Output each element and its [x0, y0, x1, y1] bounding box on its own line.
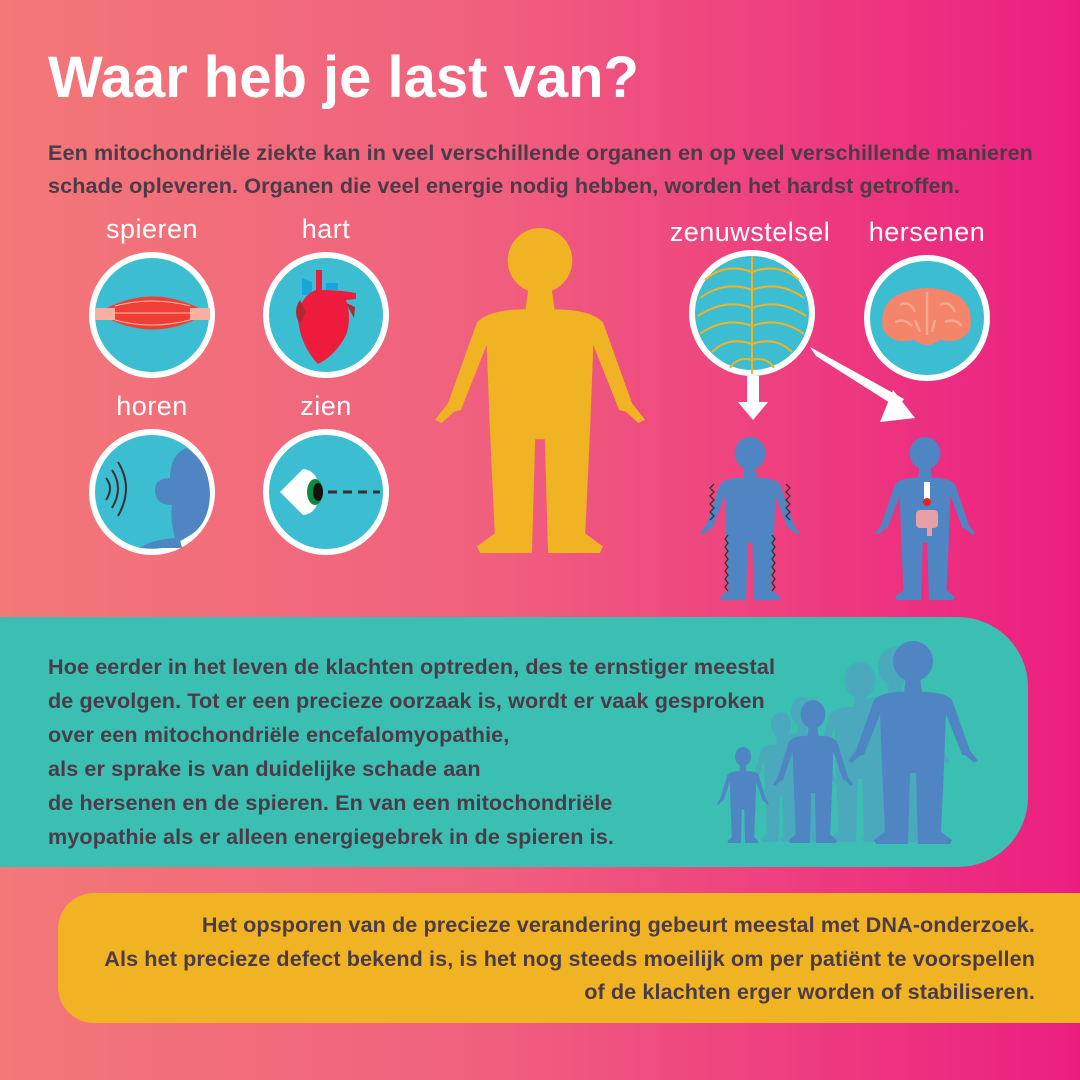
- arrow: down: [738, 376, 768, 420]
- figure: growing family: [717, 641, 978, 844]
- label: horen: horen: [116, 391, 188, 421]
- text: DNA-onderzoek: Het opsporen van de precieze verandering gebeurt meestal met DNA-onderzoek.: [202, 912, 1035, 937]
- intro text: [48, 140, 1033, 198]
- text: klachten: de hersenen en de spieren. En van een mitochondriële: [48, 790, 612, 815]
- panel: teal band: [0, 617, 1028, 867]
- figure: person with organs: [875, 437, 975, 600]
- title: Waar heb je last van?: [48, 45, 639, 110]
- icons and figures: [89, 228, 990, 600]
- label: zien: zien: [300, 391, 352, 421]
- arrow: diagonal: [810, 347, 915, 422]
- icon: ear: [92, 432, 212, 552]
- text: klachten: Hoe eerder in het leven de klachten optreden, des te ernstiger meestal: [48, 654, 775, 679]
- icon: muscle: [92, 255, 212, 375]
- text: klachten: myopathie als er alleen energiegebrek in de spieren is.: [48, 824, 614, 849]
- icon: eye: [266, 432, 386, 552]
- intro text: Een mitochondriële ziekte kan in veel verschillende organen en op veel verschillende manieren: [48, 140, 1033, 165]
- text: DNA-onderzoek: [104, 912, 1035, 1004]
- panel: yellow note: [58, 893, 1080, 1023]
- icon: brain: [867, 258, 987, 378]
- text: DNA-onderzoek: of de klachten erger worden of stabiliseren.: [584, 979, 1035, 1004]
- label: zenuwstelsel: zenuwstelsel: [670, 217, 830, 247]
- label: spieren: spieren: [106, 214, 198, 244]
- figure: person with tremors: [700, 437, 800, 600]
- icon: heart: [266, 255, 386, 375]
- label: hart: hart: [302, 214, 350, 244]
- text: klachten: de gevolgen. Tot er een precieze oorzaak is, wordt er vaak gesproken: [48, 688, 765, 713]
- text: klachten: [48, 654, 775, 849]
- intro text: schade opleveren. Organen die veel energie nodig hebben, worden het hardst getroffen.: [48, 173, 960, 198]
- figure: yellow person: [435, 228, 645, 553]
- text: DNA-onderzoek: Als het precieze defect bekend is, is het nog steeds moeilijk om per patiënt te voorspellen: [104, 946, 1035, 970]
- icon: nerves: [692, 253, 812, 374]
- text: klachten: als er sprake is van duidelijke schade aan: [48, 756, 481, 781]
- text: klachten: over een mitochondriële encefalomyopathie,: [48, 722, 509, 747]
- label: hersenen: hersenen: [869, 217, 985, 247]
